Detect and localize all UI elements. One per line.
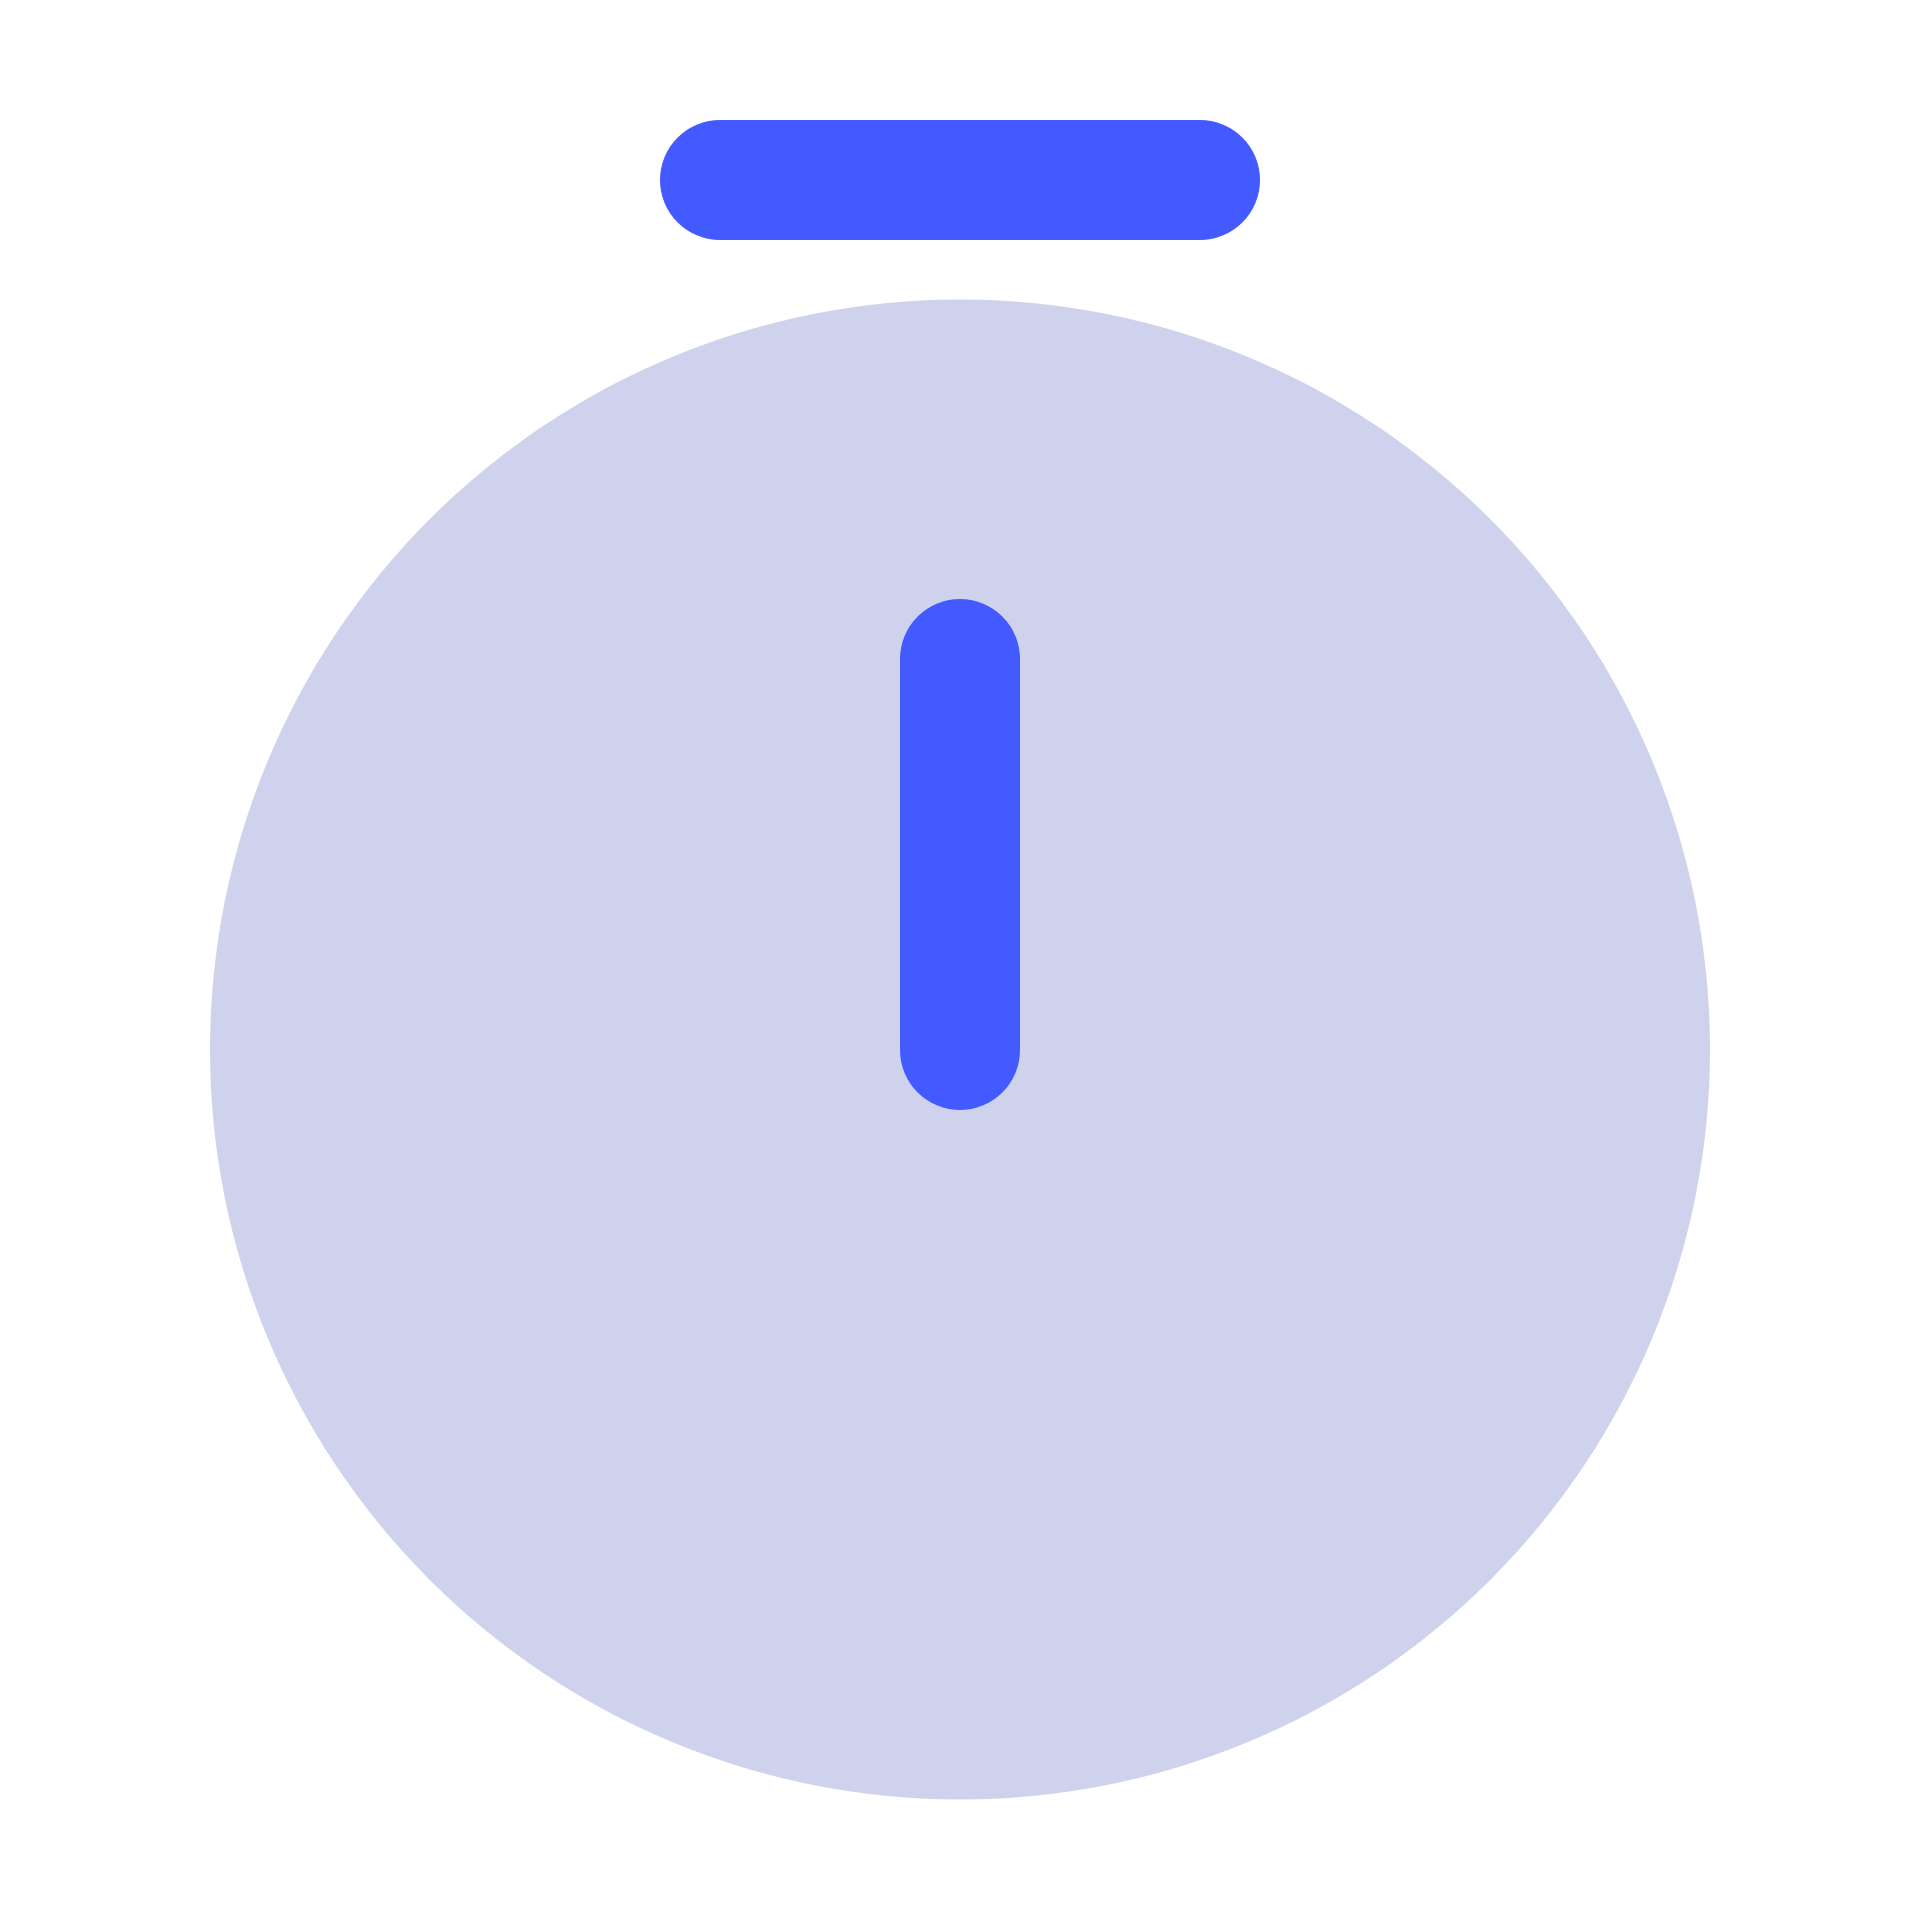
stopwatch dial [210,300,1710,1800]
stopwatch top button [720,120,1200,240]
stopwatch hand [900,659,1020,1050]
